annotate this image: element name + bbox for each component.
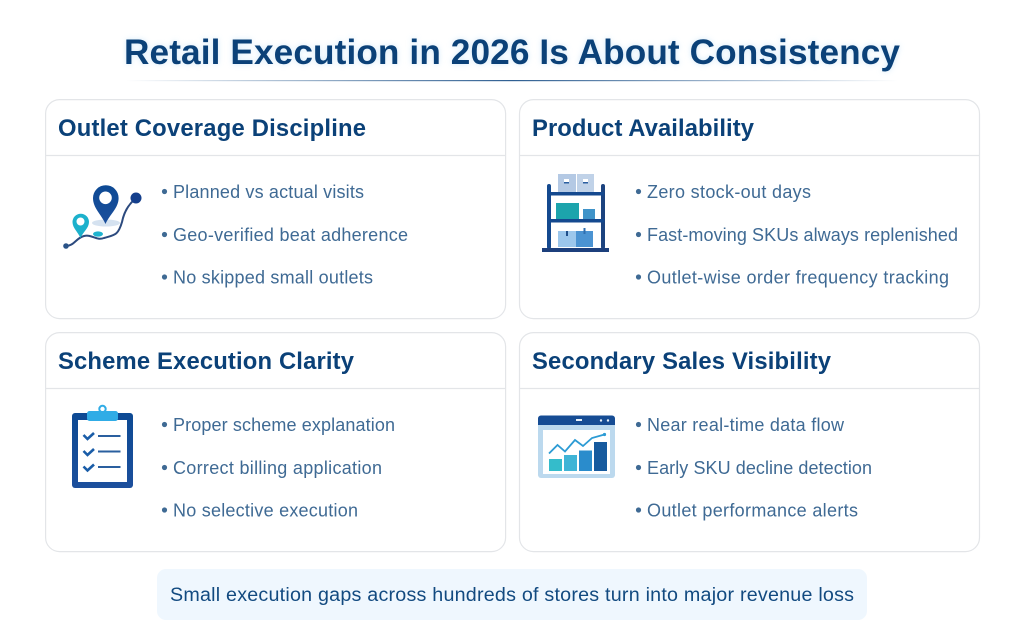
bullet list: No skipped small outlets <box>173 268 373 288</box>
panel: scheme execution clarity <box>46 333 506 552</box>
callout <box>157 569 867 620</box>
callout: Small execution gaps across hundreds of stores turn into major revenue loss <box>170 584 854 606</box>
bullet list: No selective execution <box>173 500 358 520</box>
panel: outlet coverage discipline <box>46 100 506 319</box>
bullet list: Early SKU decline detection <box>647 458 872 478</box>
panel: product availability <box>520 100 980 319</box>
bullet list <box>162 182 408 288</box>
heading: product availability: Product Availability <box>532 115 755 142</box>
bullet list: Proper scheme explanation <box>173 415 395 435</box>
title: Retail Execution in 2026 Is About Consistency <box>124 33 900 72</box>
title: Retail Execution in 2026 Is About Consistency <box>124 33 900 72</box>
icon: clipboard checklist <box>72 406 133 488</box>
heading: secondary sales: Secondary Sales Visibility <box>532 348 832 375</box>
bullet list: Geo-verified beat adherence <box>173 225 408 245</box>
bullet list: Fast-moving SKUs always replenished <box>647 225 958 245</box>
bullet list: Outlet-wise order frequency tracking <box>647 268 949 288</box>
bullet list <box>636 182 958 288</box>
bullet list <box>636 415 872 520</box>
icon: stocked shelf <box>542 174 609 252</box>
bullet list: Zero stock-out days <box>647 182 811 202</box>
icon: map pins and route <box>63 185 142 249</box>
bullet list: Outlet performance alerts <box>647 500 858 520</box>
bullet list: Planned vs actual visits <box>173 182 364 202</box>
bullet list: Correct billing application <box>173 458 382 478</box>
icon: analytics dashboard <box>538 416 615 478</box>
bullet list <box>162 415 395 520</box>
bullet list: Near real-time data flow <box>647 415 845 435</box>
heading: outlet coverage: Outlet Coverage Discipline <box>58 115 366 142</box>
panel: secondary sales visibility <box>520 333 980 552</box>
heading: scheme execution: Scheme Execution Clarity <box>58 348 355 375</box>
